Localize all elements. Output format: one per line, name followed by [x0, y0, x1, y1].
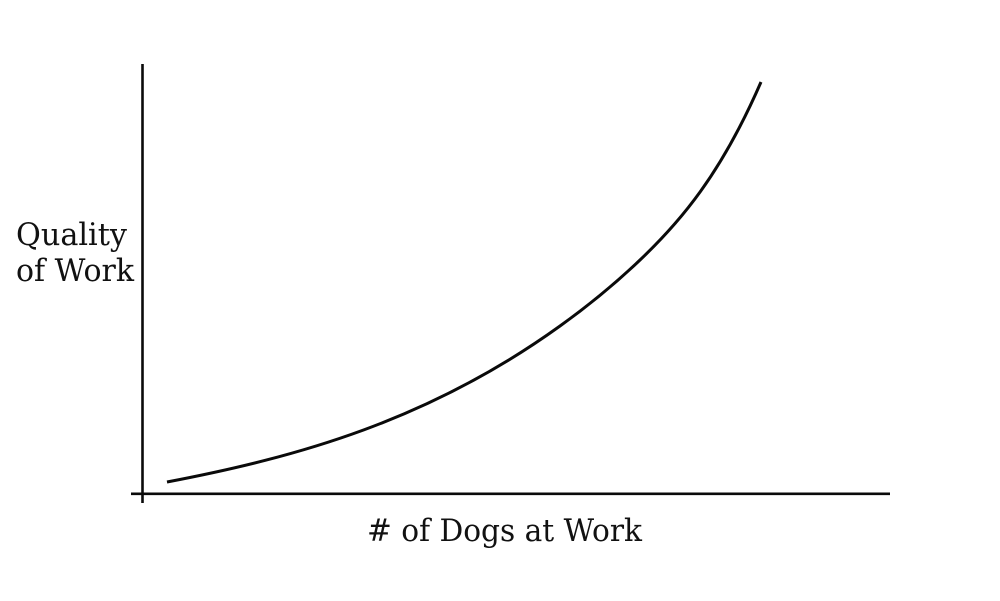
y axis label: [16, 217, 134, 289]
x axis: [131, 492, 890, 495]
curve: [167, 82, 761, 482]
y axis: [141, 64, 144, 503]
x axis label: # of Dogs at Work: [367, 513, 642, 549]
y axis label: Quality: [16, 217, 127, 253]
y axis label: of Work: [16, 253, 134, 289]
